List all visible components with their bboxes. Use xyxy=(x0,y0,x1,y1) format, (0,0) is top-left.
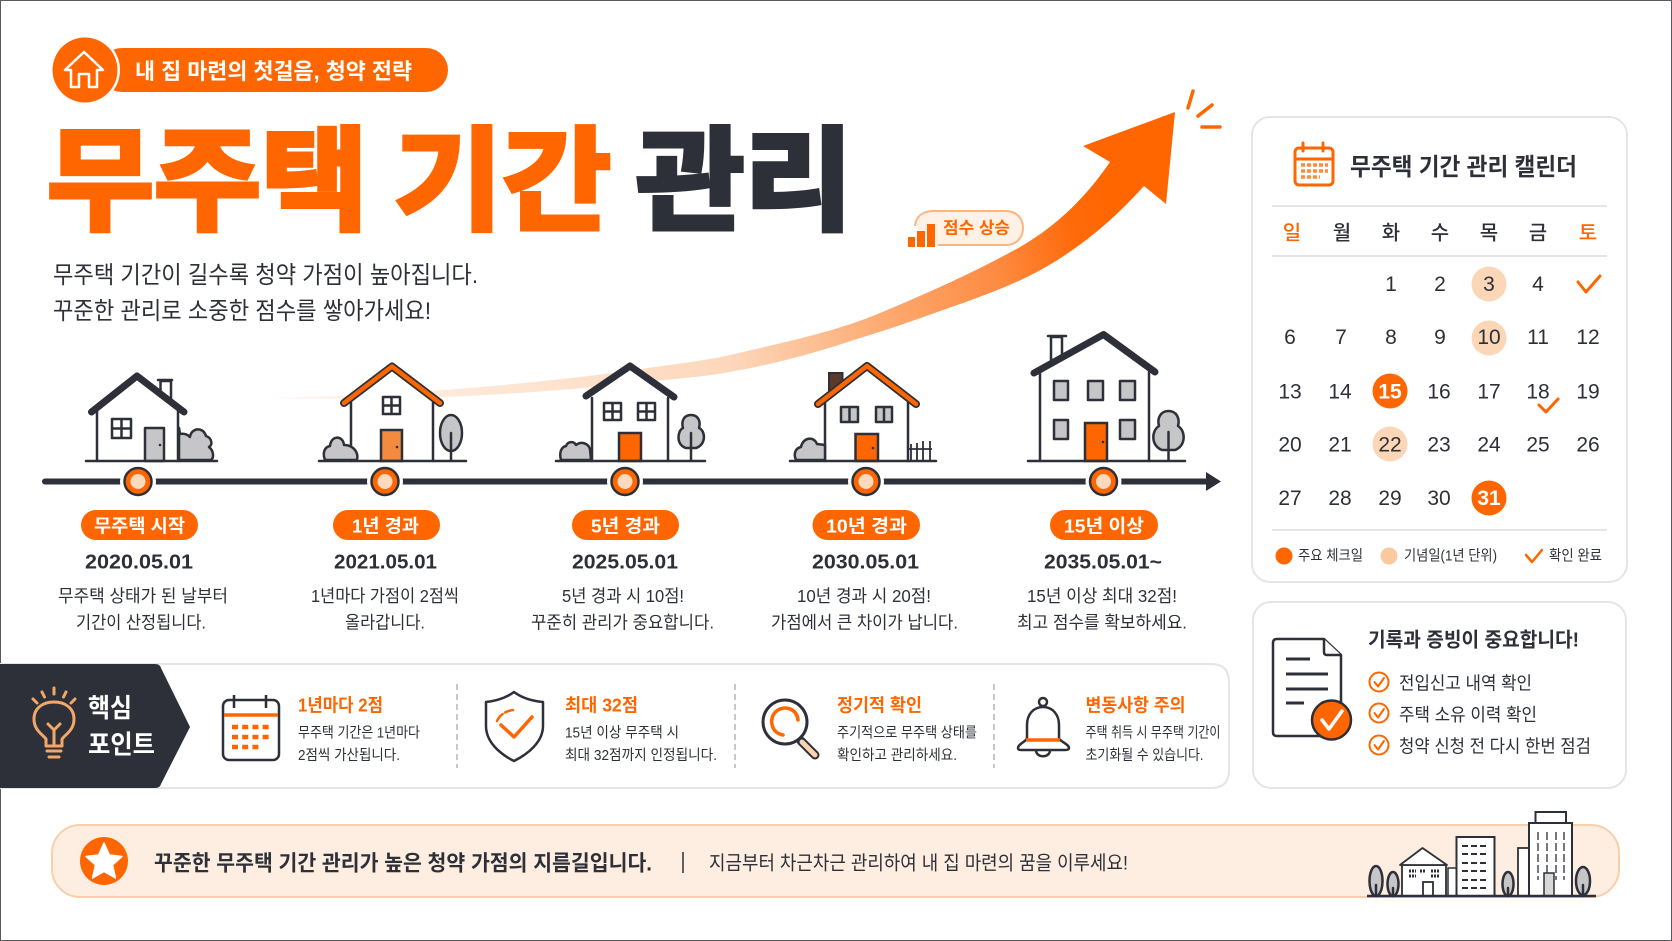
title: 기간 xyxy=(394,120,611,245)
legend xyxy=(1276,548,1602,564)
point 3 text: 주기적으로 무주택 상태를 xyxy=(837,724,977,742)
step 4: 가점에서 큰 차이가 납니다. xyxy=(771,612,958,632)
point 2 text: 최대 32점까지 인정됩니다. xyxy=(565,747,717,764)
key points label: 핵심 xyxy=(88,693,132,723)
calendar dates: 14 xyxy=(1328,380,1352,404)
node 1 xyxy=(120,464,156,500)
panel: records xyxy=(1253,602,1626,788)
weekday headers: 일 xyxy=(1283,222,1301,244)
step 1: 2020.05.01 xyxy=(85,550,193,574)
calendar dates: 3 xyxy=(1483,273,1495,296)
house 5 xyxy=(1028,334,1185,461)
title: 무주택 xyxy=(47,120,368,245)
step 3 xyxy=(531,510,714,632)
step 2 xyxy=(311,510,459,632)
calendar dates: 20 xyxy=(1278,434,1302,456)
point 3 xyxy=(763,696,977,764)
header pill xyxy=(50,35,448,105)
check marks xyxy=(1539,276,1600,412)
banner xyxy=(52,812,1619,897)
icon: bell xyxy=(1018,698,1069,756)
calendar dates: 22 xyxy=(1378,434,1402,456)
step 2: 2021.05.01 xyxy=(334,550,437,574)
point 2 text: 15년 이상 무주택 시 xyxy=(565,724,679,742)
calendar dates: 19 xyxy=(1576,380,1600,404)
point 3 text: 확인하고 관리하세요. xyxy=(837,747,957,764)
key points label: 포인트 xyxy=(88,730,155,760)
growth arrow xyxy=(252,91,1220,399)
step 5: 15년 이상 xyxy=(1064,516,1144,536)
icon: calendar xyxy=(223,695,279,760)
step 5 xyxy=(1017,510,1187,632)
panel: key points xyxy=(0,664,1229,788)
step 5: 최고 점수를 확보하세요. xyxy=(1017,612,1187,632)
node 4 xyxy=(848,464,884,500)
score rise badge: 점수 상승 xyxy=(943,218,1010,238)
weekday headers: 토 xyxy=(1579,222,1597,244)
subtitle: 꾸준한 관리로 소중한 점수를 쌓아가세요! xyxy=(53,298,431,325)
calendar dates: 28 xyxy=(1328,487,1352,510)
score rise badge xyxy=(908,211,1023,247)
icon: shield xyxy=(486,692,543,761)
key points tab xyxy=(0,664,190,788)
point 4 text: 초기화될 수 있습니다. xyxy=(1086,747,1204,764)
point 4 text: 변동사항 주의 xyxy=(1086,696,1186,716)
calendar dates: 27 xyxy=(1278,487,1302,510)
calendar dates xyxy=(1278,273,1600,510)
calendar dates: 12 xyxy=(1576,326,1600,349)
calendar dates: 7 xyxy=(1335,326,1347,349)
city skyline xyxy=(1367,812,1596,896)
calendar dates: 29 xyxy=(1378,487,1402,510)
node 2 xyxy=(367,464,403,500)
checklist: 주택 소유 이력 확인 xyxy=(1399,705,1537,725)
step 4: 10년 경과 xyxy=(826,516,907,536)
point 2 text: 최대 32점 xyxy=(565,696,638,716)
calendar dates: 2 xyxy=(1434,273,1446,296)
calendar dates: 25 xyxy=(1526,434,1550,456)
banner bold message: 꾸준한 무주택 기간 관리가 높은 청약 가점의 지름길입니다. xyxy=(154,852,652,876)
point 3 text: 정기적 확인 xyxy=(837,696,922,716)
arrow sparkles xyxy=(1188,91,1220,127)
calendar dates: 11 xyxy=(1527,326,1549,349)
calendar dates: 6 xyxy=(1284,326,1296,349)
step 3: 5년 경과 시 10점! xyxy=(562,586,684,606)
timeline xyxy=(45,464,1221,500)
step 3: 5년 경과 xyxy=(591,516,660,536)
step 4: 10년 경과 시 20점! xyxy=(797,586,931,606)
calendar dates: 8 xyxy=(1385,326,1397,349)
point 1 xyxy=(223,695,420,764)
calendar dates: 31 xyxy=(1477,487,1501,510)
calendar dates: 16 xyxy=(1427,380,1451,404)
point 1 text xyxy=(298,696,420,764)
point 1 text: 1년마다 2점 xyxy=(298,696,383,716)
point 2 text xyxy=(565,696,717,764)
weekday headers: 목 xyxy=(1480,222,1498,244)
legend: 기념일(1년 단위) xyxy=(1404,548,1497,564)
subtitle xyxy=(53,262,478,325)
checklist: 청약 신청 전 다시 한번 점검 xyxy=(1399,736,1591,756)
calendar dates: 9 xyxy=(1434,326,1446,349)
calendar dates: 18 xyxy=(1526,380,1550,404)
point 2 xyxy=(486,692,717,764)
step 1 xyxy=(58,510,228,632)
point 1 text: 무주택 기간은 1년마다 xyxy=(298,724,420,742)
weekday headers: 금 xyxy=(1529,222,1547,244)
icon: magnifier xyxy=(763,700,815,755)
title: 관리 xyxy=(636,120,853,245)
calendar dates: 17 xyxy=(1477,380,1501,404)
icon: house xyxy=(65,52,103,87)
icon: light bulb xyxy=(33,688,75,757)
panel: calendar xyxy=(1252,117,1627,582)
house 3 xyxy=(556,366,705,461)
house 4 xyxy=(790,366,936,461)
weekday headers: 수 xyxy=(1431,222,1449,244)
records heading: 기록과 증빙이 중요합니다! xyxy=(1368,628,1579,652)
calendar dates: 4 xyxy=(1532,273,1544,296)
point 4 text xyxy=(1086,696,1220,764)
step 1: 기간이 산정됩니다. xyxy=(76,612,206,632)
node 5 xyxy=(1086,464,1122,500)
icon: document xyxy=(1273,639,1351,740)
calendar dates: 23 xyxy=(1427,434,1451,456)
step 4: 2030.05.01 xyxy=(812,550,919,574)
checklist: 전입신고 내역 확인 xyxy=(1399,674,1532,694)
date highlights xyxy=(1372,266,1506,516)
step 1: 무주택 시작 xyxy=(94,516,185,536)
subtitle: 무주택 기간이 길수록 청약 가점이 높아집니다. xyxy=(53,262,478,289)
house 2 xyxy=(319,366,466,461)
icon: star xyxy=(80,837,128,885)
point 1 text: 2점씩 가산됩니다. xyxy=(298,747,400,764)
step 3: 꾸준히 관리가 중요합니다. xyxy=(531,612,714,632)
legend: 주요 체크일 xyxy=(1298,548,1363,564)
node 3 xyxy=(607,464,643,500)
calendar title: 무주택 기간 관리 캘린더 xyxy=(1350,154,1577,181)
house 1 xyxy=(86,376,217,461)
weekday headers: 월 xyxy=(1333,222,1351,244)
step 2: 1년마다 가점이 2점씩 xyxy=(311,586,459,606)
step 2: 1년 경과 xyxy=(352,516,419,536)
step 2: 올라갑니다. xyxy=(345,612,425,632)
icon: calendar xyxy=(1295,143,1333,185)
step 5: 2035.05.01~ xyxy=(1044,550,1162,574)
calendar dates: 30 xyxy=(1427,487,1451,510)
weekday headers xyxy=(1283,222,1597,244)
point 4 xyxy=(1018,696,1220,764)
point 3 text xyxy=(837,696,977,764)
calendar dates: 13 xyxy=(1278,380,1302,404)
step 4 xyxy=(771,510,958,632)
calendar dates: 21 xyxy=(1328,434,1352,456)
calendar dates: 1 xyxy=(1385,273,1397,296)
point 4 text: 주택 취득 시 무주택 기간이 xyxy=(1086,724,1220,742)
weekday headers: 화 xyxy=(1382,222,1400,244)
title xyxy=(47,120,853,245)
calendar dates: 10 xyxy=(1477,326,1501,349)
legend: 확인 완료 xyxy=(1549,548,1602,564)
calendar dates: 26 xyxy=(1576,434,1600,456)
header pill text: 내 집 마련의 첫걸음, 청약 전략 xyxy=(135,59,412,84)
calendar dates: 15 xyxy=(1378,380,1402,404)
step 5: 15년 이상 최대 32점! xyxy=(1027,586,1177,606)
checklist xyxy=(1370,672,1591,756)
calendar dates: 24 xyxy=(1477,434,1501,456)
key points label xyxy=(88,693,155,760)
step 1: 무주택 상태가 된 날부터 xyxy=(58,586,228,606)
step 3: 2025.05.01 xyxy=(572,550,678,574)
banner message: 지금부터 차근차근 관리하여 내 집 마련의 꿈을 이루세요! xyxy=(709,852,1128,874)
